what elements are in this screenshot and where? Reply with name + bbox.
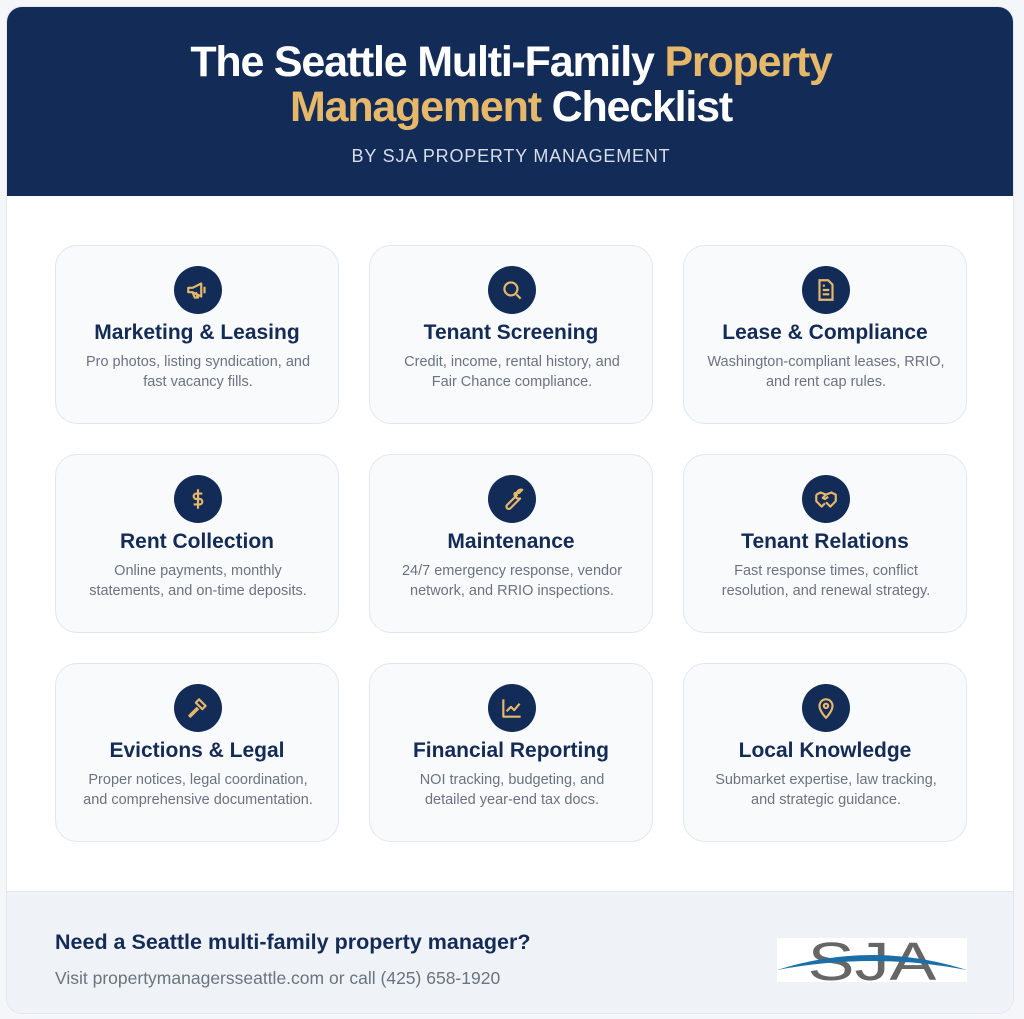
card: Maintenance: network, and RRIO inspections. (410, 582, 614, 598)
header (7, 7, 1015, 196)
card: Maintenance (369, 454, 653, 633)
card: Tenant Relations: resolution, and renewal strategy. (722, 582, 930, 598)
title line 2: Management Checklist (290, 83, 732, 131)
card: Lease & Compliance: Washington-compliant leases, RRIO, (707, 354, 945, 370)
card: Rent Collection: Rent Collection (120, 530, 274, 553)
card: Financial Reporting (369, 663, 653, 842)
footer heading: Need a Seattle multi-family property manager? (55, 930, 531, 954)
card: Marketing & Leasing: Marketing & Leasing (94, 321, 300, 344)
icon: search (488, 266, 536, 314)
icon: document (802, 266, 850, 314)
card: Rent Collection (55, 454, 339, 633)
icon: megaphone (174, 266, 222, 314)
icon: dollar (174, 475, 222, 523)
card: Rent Collection: statements, and on-time deposits. (89, 582, 307, 598)
icon: wrench (488, 475, 536, 523)
card: Tenant Screening: Credit, income, rental history, and (404, 354, 620, 370)
card: Evictions & Legal: Proper notices, legal coordination, (88, 772, 308, 788)
card: Tenant Relations: Fast response times, conflict (734, 563, 918, 579)
card: Evictions & Legal (55, 663, 339, 842)
card: Evictions & Legal: and comprehensive documentation. (83, 792, 313, 808)
card: Local Knowledge (683, 663, 967, 842)
card: Tenant Screening: Tenant Screening (424, 321, 598, 344)
card: Financial Reporting: NOI tracking, budgeting, and (420, 772, 604, 788)
card: Lease & Compliance (683, 245, 967, 424)
footer contact: Visit propertymanagersseattle.com or call (425) 658-1920 (55, 968, 500, 988)
card: Maintenance: Maintenance (447, 530, 575, 553)
card: Lease & Compliance: Lease & Compliance (722, 321, 928, 344)
card: Local Knowledge: Submarket expertise, law tracking, (715, 772, 937, 788)
title line 1: The Seattle Multi-Family Property (190, 38, 832, 86)
icon: handshake (802, 475, 850, 523)
card: Evictions & Legal: Evictions & Legal (109, 739, 285, 762)
card: Rent Collection: Online payments, monthly (114, 563, 282, 579)
card: Marketing & Leasing (55, 245, 339, 424)
icon: map pin (802, 684, 850, 732)
card: Tenant Screening: Fair Chance compliance. (432, 374, 592, 390)
card: Tenant Screening (369, 245, 653, 424)
icon: gavel (174, 684, 222, 732)
card: Financial Reporting: detailed year-end tax docs. (425, 792, 599, 808)
footer (7, 891, 1015, 1015)
logo: SJA (777, 938, 967, 982)
card: Tenant Relations: Tenant Relations (741, 530, 909, 553)
card: Lease & Compliance: and rent cap rules. (766, 374, 886, 390)
card: Tenant Relations (683, 454, 967, 633)
card: Local Knowledge: Local Knowledge (739, 739, 911, 762)
card: Marketing & Leasing: fast vacancy fills. (143, 374, 253, 390)
card: Financial Reporting: Financial Reporting (413, 739, 609, 762)
card: Marketing & Leasing: Pro photos, listing syndication, and (86, 354, 310, 370)
icon: chart (488, 684, 536, 732)
card: Maintenance: 24/7 emergency response, vendor (402, 563, 622, 579)
subtitle: BY SJA PROPERTY MANAGEMENT (352, 146, 670, 166)
card: Local Knowledge: and strategic guidance. (751, 792, 901, 808)
